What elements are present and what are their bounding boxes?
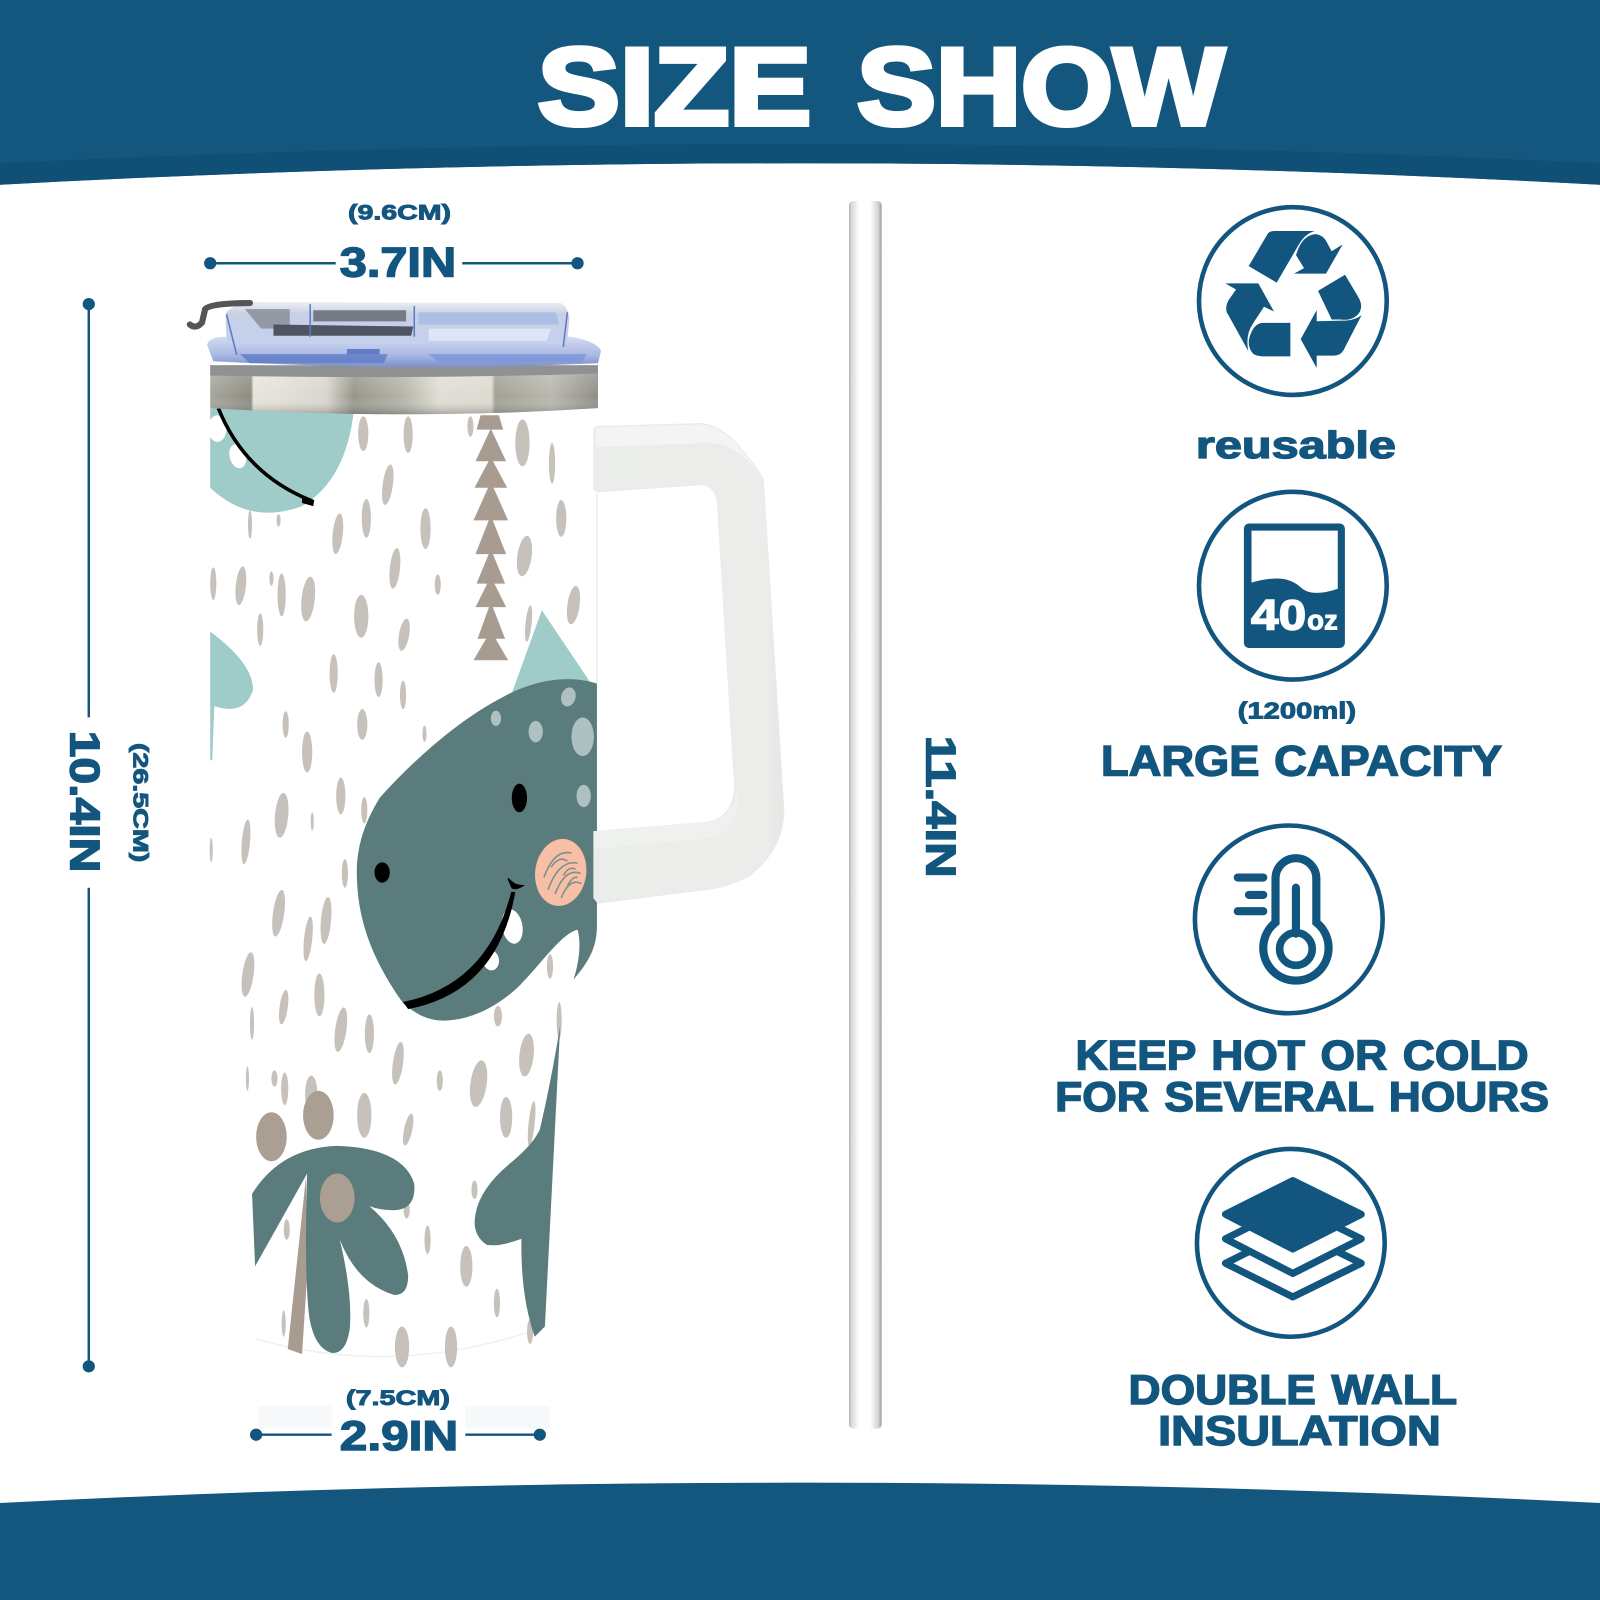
- icon: 40oz capacity: [1199, 492, 1387, 680]
- tumbler base edge: [255, 1327, 545, 1357]
- label: large capacity: LARGE CAPACITY: [1101, 738, 1502, 786]
- icon: 40oz capacity: 40: [1251, 592, 1306, 640]
- icon: thermometer: [1195, 826, 1383, 1013]
- label: double wall insulation: DOUBLE WALL: [1129, 1366, 1457, 1413]
- label: double wall insulation: INSULATION: [1158, 1407, 1441, 1454]
- dimension: bottom width: [250, 1386, 550, 1459]
- title: SHOW: [857, 26, 1224, 148]
- title: [538, 26, 1224, 148]
- tumbler body: [210, 413, 598, 1367]
- label: keep hot or cold: [1055, 1031, 1549, 1120]
- label: reusable: reusable: [1196, 424, 1396, 466]
- lid: [207, 302, 601, 367]
- dinosaur head: [357, 679, 597, 1021]
- label: 1200ml: (1200ml): [1238, 697, 1356, 723]
- title: SIZE: [538, 26, 811, 148]
- dinosaur lower body: [475, 1026, 560, 1337]
- straw: [849, 201, 882, 1429]
- palm tree: [252, 1091, 414, 1354]
- icon: 40oz capacity: oz: [1307, 605, 1338, 636]
- dimension: top width: [204, 200, 584, 286]
- dinosaur spike: [511, 610, 590, 695]
- tumbler handle: [594, 423, 784, 903]
- dimension: top width: (9.6CM): [348, 200, 451, 224]
- dimension: height: (26.5CM): [129, 743, 153, 862]
- footer band: [0, 1483, 1600, 1600]
- dimension: height: 10.4IN: [61, 731, 108, 872]
- label: double wall insulation: [1129, 1366, 1457, 1454]
- speckle pattern: [210, 416, 582, 1367]
- tumbler: [190, 302, 784, 1367]
- dimension: bottom width: 2.9IN: [340, 1412, 458, 1459]
- left teal shape: [210, 632, 253, 760]
- tumbler body edge: [596, 493, 598, 684]
- taupe triangle stack: [473, 415, 508, 660]
- dimension: bottom width: (7.5CM): [346, 1386, 450, 1410]
- dimension: height: [61, 298, 153, 1372]
- top-left teal shape with smile: [208, 408, 354, 513]
- header band: [0, 0, 1600, 185]
- straw length label: 11.4IN: [918, 736, 965, 878]
- label: keep hot or cold: FOR SEVERAL HOURS: [1055, 1073, 1549, 1120]
- dimension: top width: 3.7IN: [340, 239, 456, 286]
- icon: layers: [1197, 1149, 1385, 1337]
- label: keep hot or cold: KEEP HOT OR COLD: [1076, 1031, 1529, 1078]
- lid latch: [190, 303, 250, 327]
- stainless rim: [210, 365, 598, 414]
- icon: recycle: [1199, 207, 1387, 395]
